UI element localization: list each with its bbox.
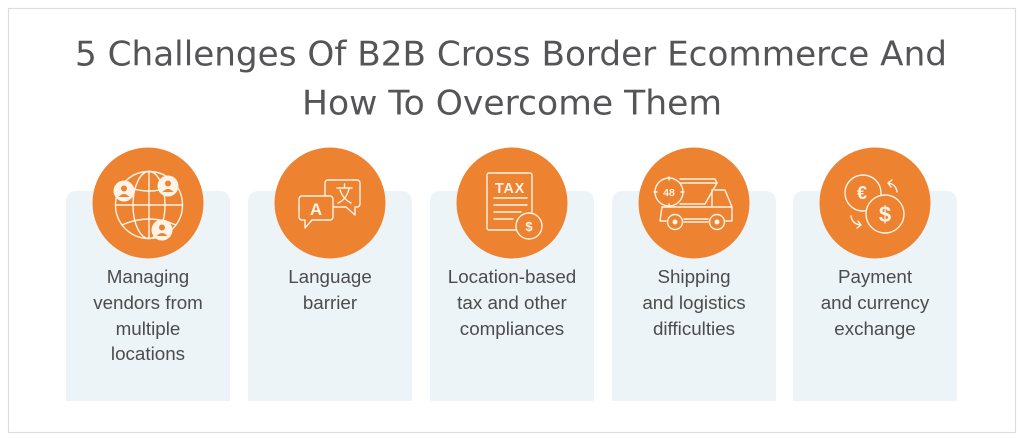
vendor avatar 2 [158, 176, 178, 196]
icon: tax document [456, 148, 568, 258]
label: locations [111, 343, 185, 364]
label: Shipping [657, 266, 731, 287]
label [821, 266, 930, 339]
label: and currency [821, 292, 930, 313]
icon: translation speech bubbles: A [310, 200, 322, 219]
label [288, 266, 372, 313]
icon: currency exchange [820, 148, 930, 258]
icon: delivery truck with 48 hour clock: 48 [663, 187, 675, 199]
label [93, 266, 203, 364]
panel: language barrier [248, 148, 412, 401]
icon: tax document: $ [525, 219, 533, 234]
label: tax and other [457, 292, 567, 313]
label: Payment [838, 266, 913, 287]
label: compliances [460, 318, 564, 339]
icon: currency exchange: € [857, 183, 867, 203]
label: multiple [116, 318, 180, 339]
label: and logistics [642, 292, 746, 313]
icon: delivery truck with 48 hour clock [638, 148, 750, 258]
label: barrier [303, 292, 357, 313]
icon: tax document: TAX [495, 181, 525, 197]
label: exchange [834, 318, 916, 339]
panel: shipping [612, 148, 776, 401]
icon: globe with vendors [92, 148, 204, 258]
label: Language [288, 266, 372, 287]
title: How To Overcome Them [302, 84, 722, 124]
label: difficulties [653, 318, 735, 339]
label: Location-based [448, 266, 576, 287]
label: Managing [107, 266, 189, 287]
title: 5 Challenges Of B2B Cross Border Ecommerce And [75, 34, 947, 74]
label: vendors from [93, 292, 203, 313]
icon: currency exchange: $ [879, 202, 891, 227]
vendor avatar 3 [152, 220, 172, 240]
vendor avatar 1 [114, 180, 134, 202]
panel: tax [430, 148, 594, 401]
panel: payment [793, 148, 957, 401]
label [448, 266, 576, 339]
icon: translation speech bubbles [274, 148, 386, 258]
panel: managing vendors [66, 148, 230, 401]
label [642, 266, 746, 339]
title [75, 34, 947, 124]
